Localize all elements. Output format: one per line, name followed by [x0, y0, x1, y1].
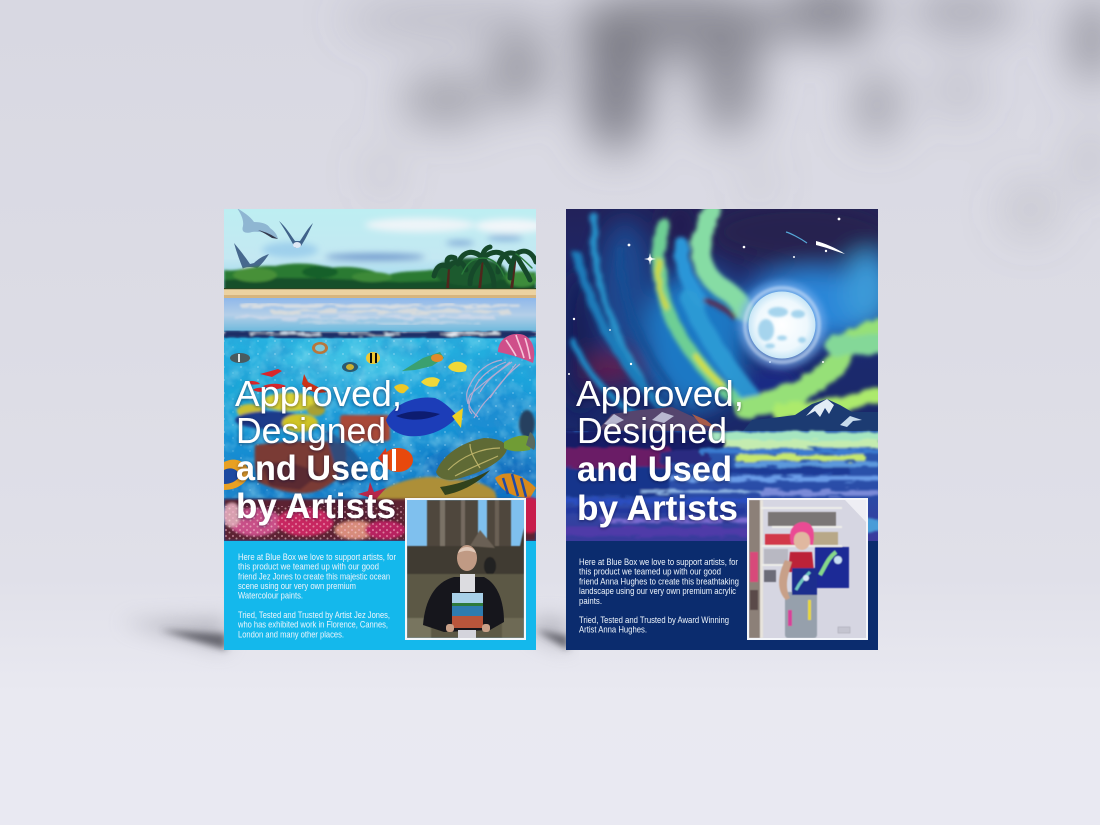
bubbles — [224, 340, 536, 495]
water — [566, 431, 878, 541]
body text: Tried, Tested and Trusted by Award Winning — [579, 615, 729, 625]
body text: this product we teamed up with our good — [238, 562, 379, 572]
reef — [223, 497, 544, 541]
coral polyps — [224, 506, 404, 541]
mountains — [596, 399, 878, 432]
body text: friend Jez Jones to create this majestic ocean — [238, 571, 390, 581]
stars — [568, 218, 845, 375]
person — [423, 545, 504, 638]
body text: landscape using our very own premium acrylic — [579, 586, 736, 596]
surface reflection — [224, 298, 536, 332]
headline: by Artists — [577, 489, 738, 528]
photo: Jez Jones — [405, 498, 526, 640]
canvases — [815, 547, 849, 588]
headline: and Used — [577, 450, 732, 489]
body text — [237, 552, 396, 639]
blue tang — [386, 397, 463, 436]
right rainbow fish — [495, 473, 536, 498]
body text: Here at Blue Box we love to support artists, for — [579, 557, 738, 567]
painting: island and ocean scene — [220, 208, 545, 541]
sandy coral — [376, 474, 500, 501]
navy text panel — [566, 541, 878, 650]
left shelf column — [749, 500, 760, 638]
body text: Artist Anna Hughes. — [579, 625, 647, 635]
headline — [235, 373, 402, 526]
palm trees — [434, 247, 536, 290]
left rainbow fish — [224, 460, 250, 490]
floor shadows — [120, 618, 568, 650]
clouds — [262, 218, 545, 260]
jellyfish — [467, 334, 534, 418]
turtle — [436, 432, 535, 495]
body text: this product we teamed up with our good — [579, 567, 721, 577]
brown coral — [255, 430, 368, 493]
person — [785, 592, 817, 638]
photo: Anna Hughes — [747, 498, 868, 640]
poster: Jez Jones ocean — [220, 208, 545, 650]
aurora brush strokes — [572, 212, 878, 420]
beach — [224, 289, 536, 295]
blue text panel — [224, 541, 536, 650]
headline — [576, 373, 744, 528]
headline: Approved, — [576, 373, 744, 414]
starfish — [358, 482, 386, 500]
small fish — [230, 342, 467, 393]
body text: paints. — [579, 596, 602, 606]
headline: Designed — [577, 410, 727, 451]
headline: and Used — [236, 449, 390, 488]
dark waterline — [224, 331, 536, 338]
underwater — [224, 336, 536, 541]
shelves — [761, 507, 842, 509]
body text: Here at Blue Box we love to support artists, for — [238, 552, 396, 562]
painting: northern lights and moon — [566, 209, 878, 541]
body text — [579, 557, 739, 635]
headline: Approved, — [235, 373, 402, 414]
poster: Anna Hughes aurora — [560, 195, 895, 650]
water mottling — [224, 338, 536, 498]
headline: Designed — [236, 410, 386, 451]
seagulls — [234, 208, 313, 274]
clownfish — [378, 448, 413, 472]
body text: scene using our very own premium — [238, 581, 356, 591]
body text: Watercolour paints. — [238, 591, 303, 601]
striped fish school — [235, 393, 390, 441]
body text: London and many other places. — [238, 629, 344, 639]
forest — [224, 258, 538, 291]
headline: by Artists — [236, 487, 396, 526]
foliage shadows — [340, 0, 1100, 238]
body text: friend Anna Hughes to create this breathtaking — [579, 576, 739, 586]
body text: who has exhibited work in Florence, Cannes, — [237, 620, 388, 630]
rock at right — [519, 410, 535, 438]
moon — [738, 281, 826, 369]
sky colour masses — [564, 195, 895, 410]
body text: Tried, Tested and Trusted by Artist Jez Jones, — [238, 610, 390, 620]
